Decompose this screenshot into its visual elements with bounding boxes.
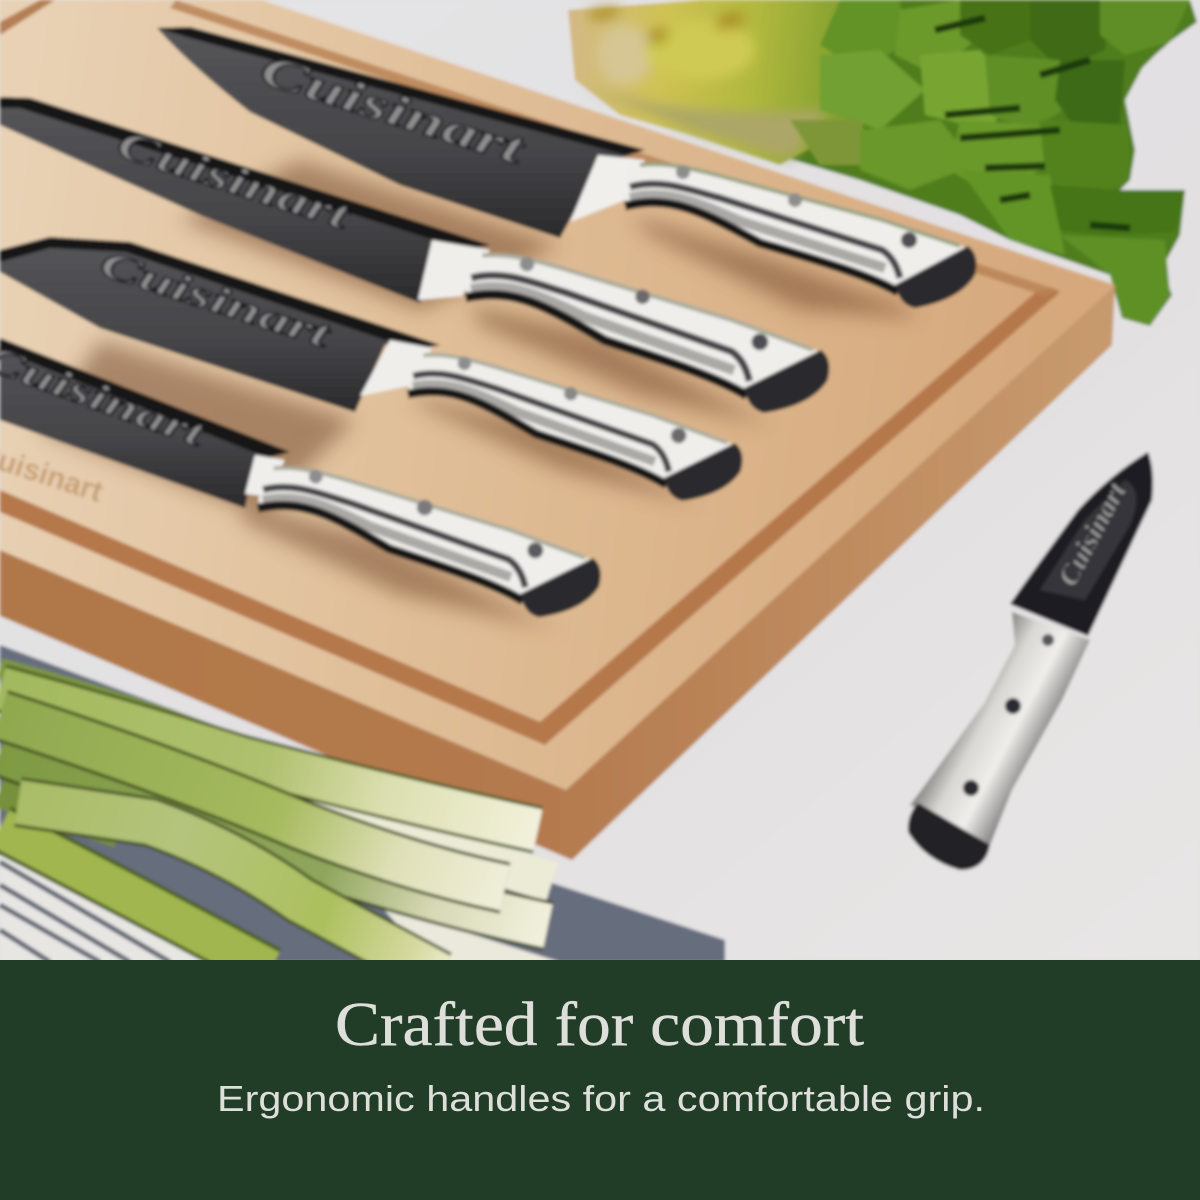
knife 2: sheath xyxy=(0,104,434,304)
knife 3: sheath logo: Cuisinart xyxy=(95,243,337,357)
paring knife: handle xyxy=(910,612,1090,845)
knife 3: sheath xyxy=(0,244,390,414)
knife 3: end cap xyxy=(663,441,743,503)
knife 2: handle xyxy=(462,253,832,415)
board: juice groove xyxy=(0,288,1060,745)
paring knife xyxy=(908,452,1153,870)
lettuce: yellow heart xyxy=(568,0,880,165)
knife 4: end cap xyxy=(519,556,601,619)
product photo: knives on cutting board xyxy=(0,0,1198,960)
subtitle: Ergonomic handles for a comfortable grip. xyxy=(217,1078,985,1119)
knife 4: sheath xyxy=(0,352,264,510)
knife 1: end cap xyxy=(895,246,976,308)
caption band xyxy=(0,960,1200,1200)
knife 1: sheath logo: Cuisinart xyxy=(255,45,532,174)
knife 2: sheath logo: Cuisinart xyxy=(112,121,357,239)
marble countertop xyxy=(0,0,1200,960)
knife 1: handle xyxy=(625,163,976,308)
knife 2: bolster xyxy=(418,240,490,300)
title: Crafted for comfort xyxy=(335,991,864,1059)
paring knife: sheath xyxy=(1010,452,1153,636)
lettuce: leaf details xyxy=(790,0,1190,326)
knife 1: bolster xyxy=(570,155,645,222)
cutting board xyxy=(0,0,1115,860)
knife 1: sheath xyxy=(157,27,645,238)
knife shadows xyxy=(40,160,920,630)
lettuce: outer green leaves xyxy=(790,0,1198,322)
dish towel xyxy=(0,645,725,962)
paring knife: end cap xyxy=(908,803,990,870)
knife 2: end cap xyxy=(743,348,830,415)
knife 4: bolster xyxy=(245,455,285,496)
lettuce xyxy=(568,0,1197,326)
board: front side face xyxy=(0,285,1115,860)
knife 3 xyxy=(0,237,746,503)
board: top surface xyxy=(0,0,1115,790)
knife 1 xyxy=(157,27,976,308)
knife 2 xyxy=(0,97,832,415)
knife 3: handle xyxy=(405,353,746,503)
knife 4: handle xyxy=(255,466,604,619)
paring knife: sheath logo: Cuisinart xyxy=(1053,477,1133,591)
knife 3: bolster xyxy=(360,340,432,396)
green onions xyxy=(0,668,552,975)
knife 4 xyxy=(0,337,604,619)
